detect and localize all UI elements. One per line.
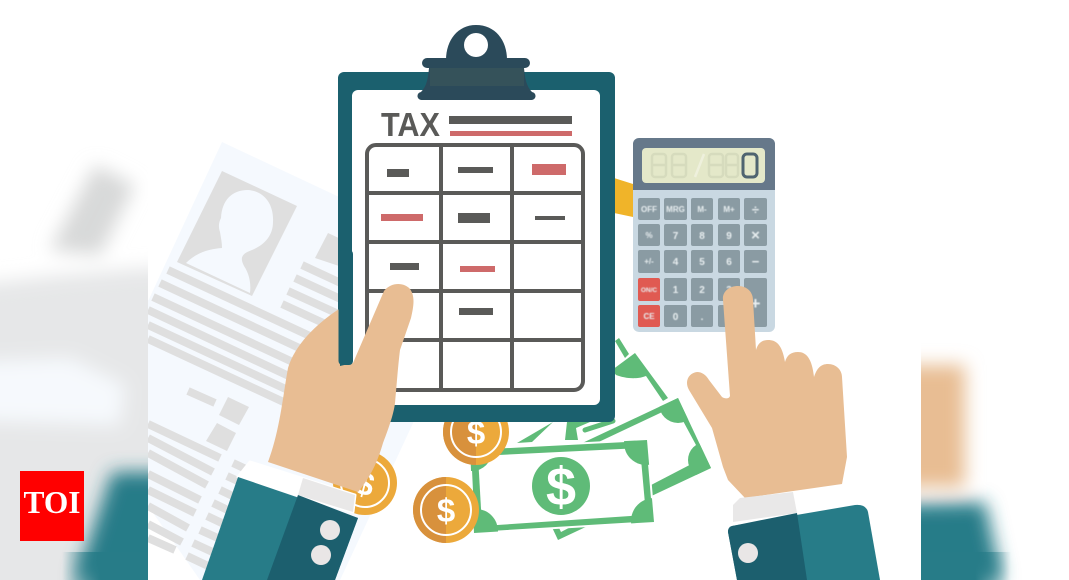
coin bottom [413,477,479,543]
front banknote: $ [546,457,576,517]
heading rules [449,116,572,136]
key labels: M- [697,205,707,214]
key labels: 4 [673,257,679,268]
coin top: $ [467,414,485,451]
form text lines [148,265,345,574]
photo placeholder [177,171,297,296]
clipboard edge over hand [338,250,353,365]
left hand [202,250,414,580]
yellow tag [614,178,633,217]
key labels: 7 [673,231,679,242]
key labels: CE [643,312,655,321]
right shirt cuff [733,492,797,522]
gold coins [333,399,509,543]
key labels: +/- [644,257,654,266]
key labels: × [751,227,760,244]
calculator [633,138,775,332]
blurred background left [0,163,148,580]
key labels: . [701,312,704,323]
key labels: M+ [723,205,735,214]
key labels: 1 [673,285,679,296]
key labels: 3 [726,285,732,296]
tax table [367,145,583,390]
coin left [333,451,397,515]
key labels: + [751,294,761,313]
front banknote [470,440,654,533]
heading: TAX [381,106,440,143]
key labels: 8 [699,231,705,242]
key labels: 0 [673,312,679,323]
key labels: 9 [726,231,732,242]
coin top [443,399,509,465]
key labels: OFF [641,205,657,214]
keypad [638,198,767,327]
TOI logo: TOI [24,484,80,520]
key labels: 5 [699,257,705,268]
coin bottom: $ [437,492,455,529]
key labels: − [752,254,760,269]
TOI logo [20,471,84,541]
left shirt cuff [238,462,355,512]
clip [417,25,536,100]
key labels: 6 [726,257,732,268]
form boxes [206,233,345,451]
right sleeve [728,505,880,580]
display [642,148,765,183]
right hand [687,286,880,580]
key labels: MRG [666,205,685,214]
back banknote [517,338,668,443]
banknotes [470,338,711,540]
blurred background right [921,352,1015,580]
left sleeve [202,477,358,580]
table entries [381,164,566,315]
key labels: 2 [699,285,705,296]
key labels: ÷ [752,202,759,217]
paper form [148,142,413,580]
middle banknote [552,398,711,540]
key labels: % [645,231,653,240]
key labels [641,202,761,323]
clipboard [338,25,615,422]
key labels: ON/C [641,287,657,294]
coin left: $ [351,463,379,504]
